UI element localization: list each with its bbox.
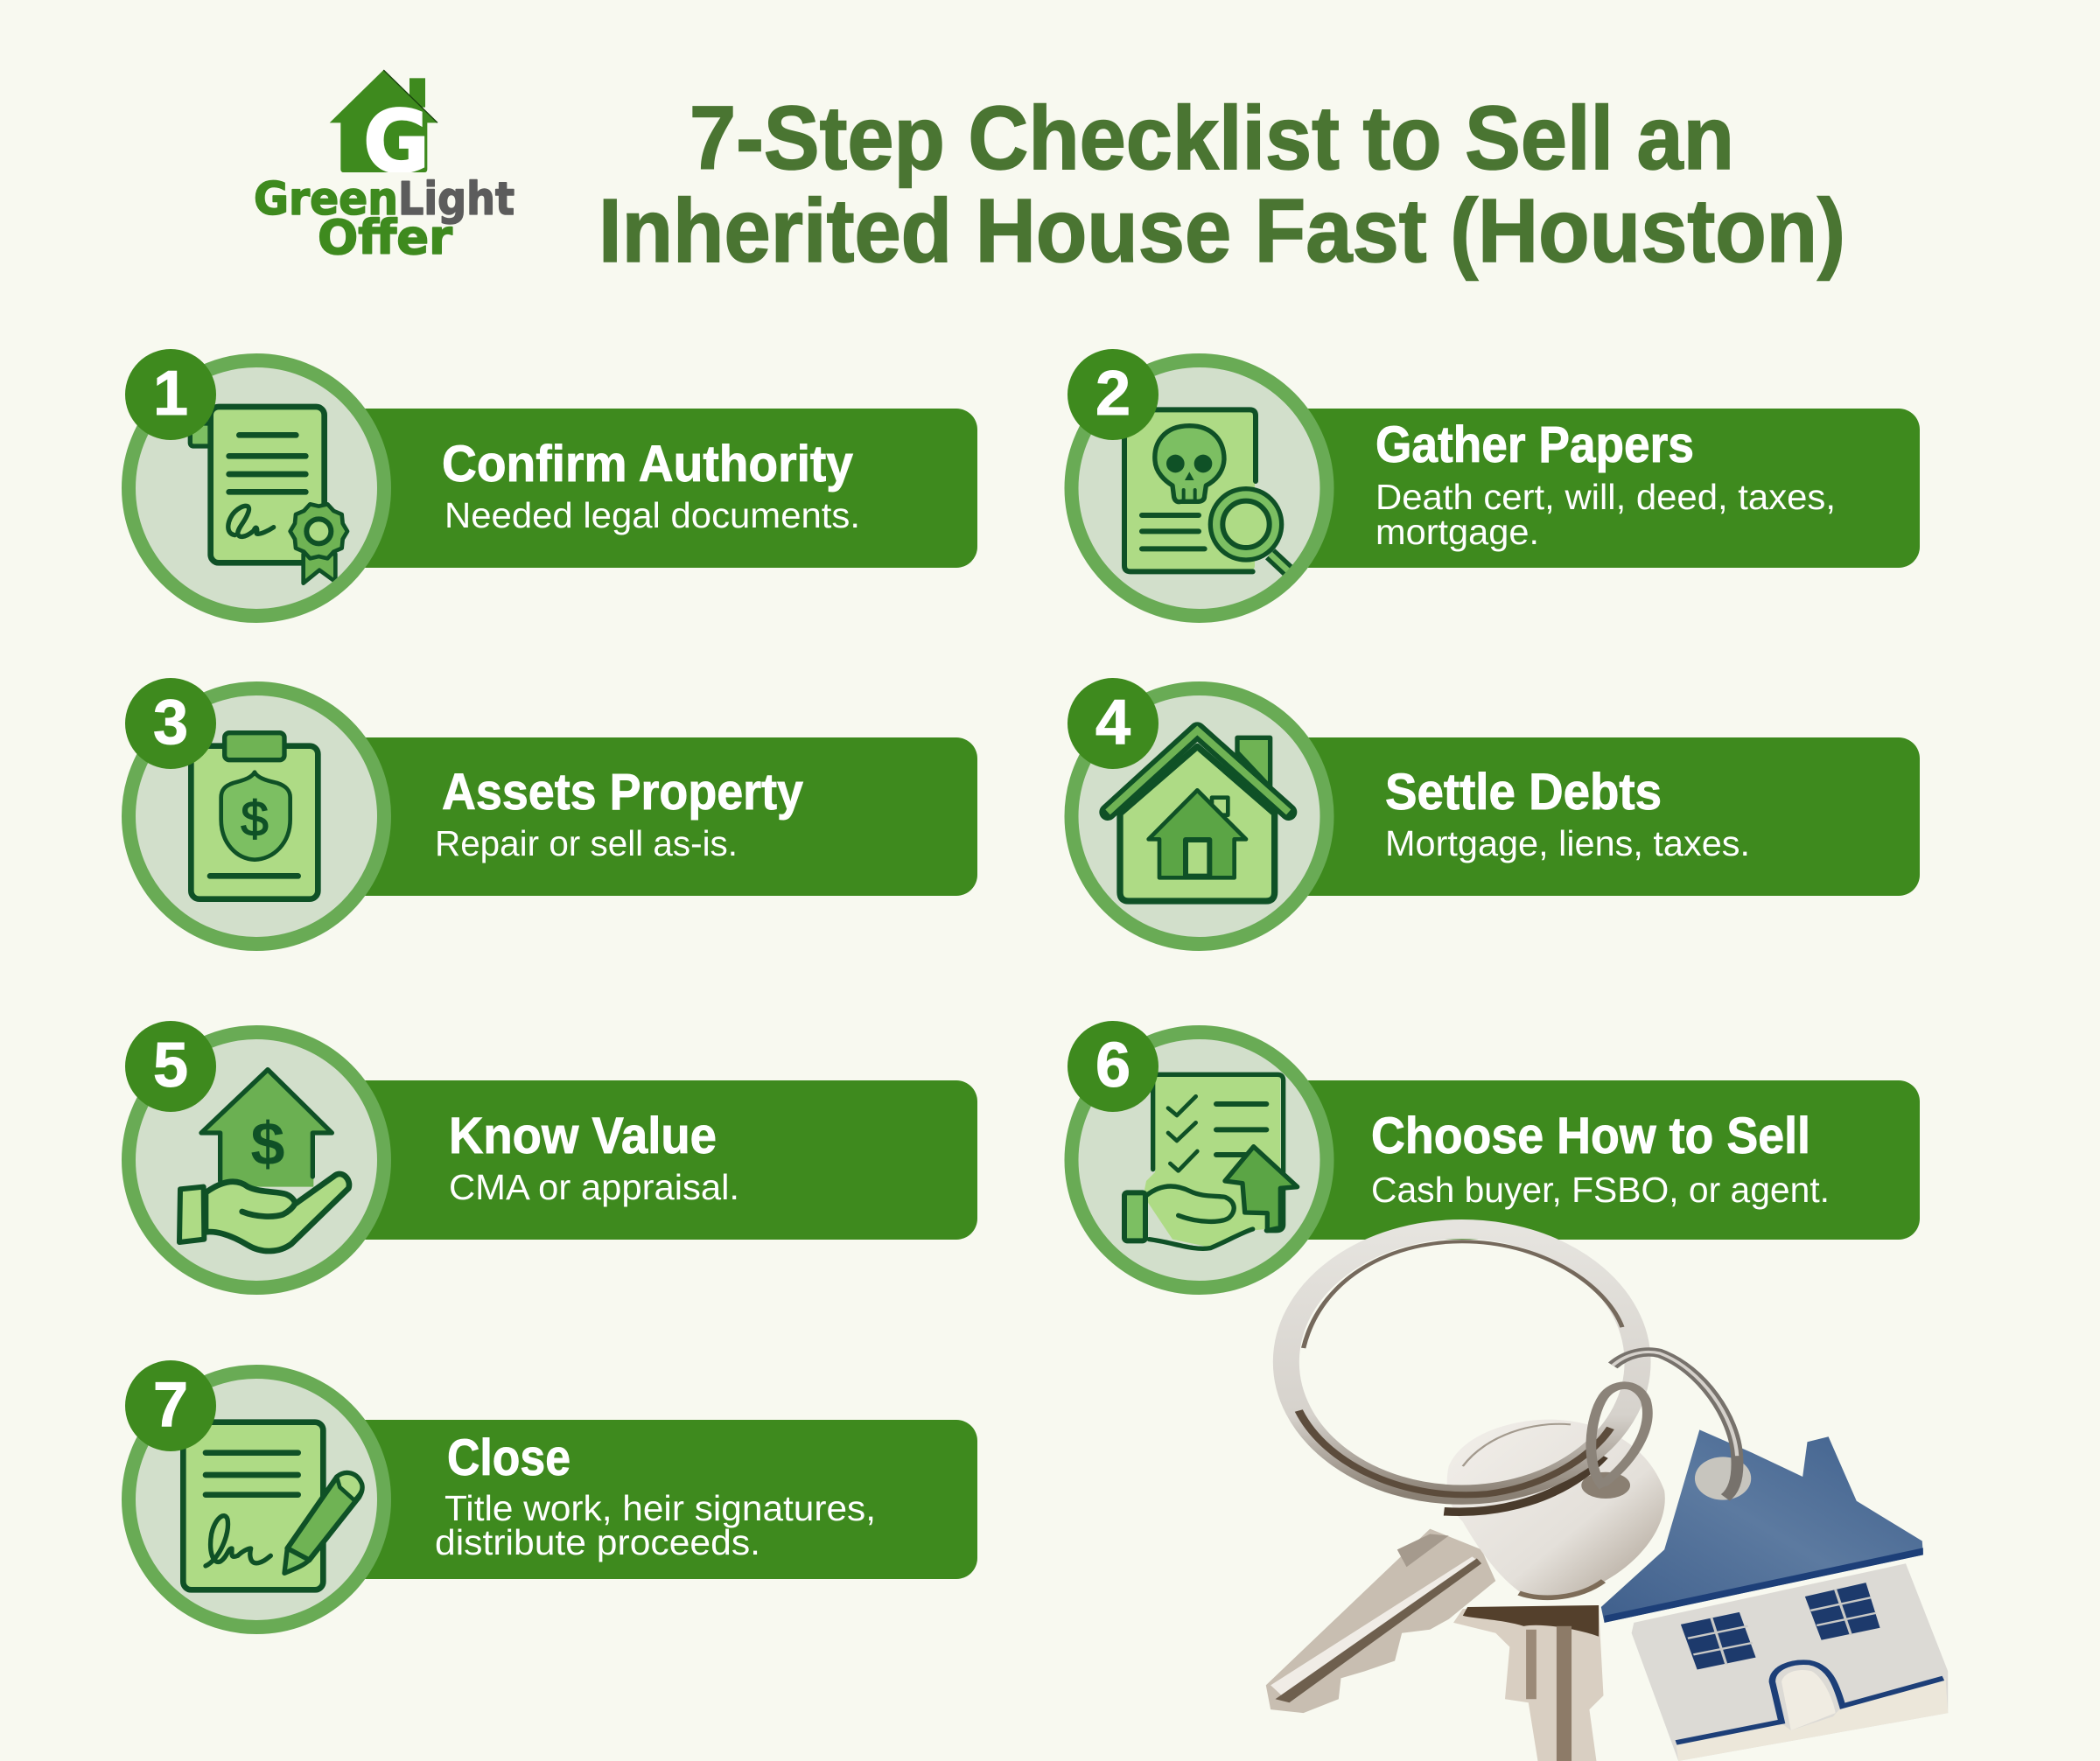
logo G letter: G [363,93,430,192]
logo wordmark Green: Green [254,173,398,226]
small link ring around keys [1591,1386,1648,1487]
house charm windows [1681,1612,1756,1669]
step 6 number badge [1068,1021,1158,1112]
step 4 number badge [1068,678,1158,769]
step 7 description: Title work, heir signatures, [444,1488,876,1528]
panel: step 4 settle debts [1068,678,1920,944]
icon: signed document and pen [183,1422,362,1590]
icon: hand holding house with dollar: $ [251,1110,284,1178]
house charm roof [1601,1429,1923,1623]
title: 7-Step Checklist to Sell an [690,87,1734,188]
first key blade [1266,1529,1495,1713]
step 3 number badge [125,678,216,769]
step 1 bar [280,409,977,568]
logo wordmark Light: Light [398,173,514,226]
step 6 description: Cash buyer, FSBO, or agent. [1371,1170,1830,1210]
second key hanging down [1453,1609,1603,1761]
charm ring through hole [1613,1352,1737,1498]
shadow under big ring [1444,1456,1603,1512]
step 3 description: Repair or sell as-is. [435,823,738,863]
logo: GreenLight Offer [254,70,514,265]
step 4 description: Mortgage, liens, taxes. [1385,823,1750,863]
step 5 bar [280,1080,977,1240]
step 1 description: Needed legal documents. [444,495,860,535]
title: Inherited House Fast (Houston) [598,180,1845,281]
step 7 heading: Close [447,1429,570,1486]
step 1 number badge: 1 [153,359,188,429]
icon: document with skull and magnifier [1124,409,1293,576]
step 2 bar [1222,409,1920,568]
step 1 heading: Confirm Authority [442,436,853,493]
icon: clipboard with dollar shield [191,733,318,899]
first key head [1447,1420,1665,1597]
icon: house within house [1108,730,1289,901]
step 7 description [435,1488,876,1562]
illustration: house keychain with keys [1266,1229,1948,1761]
step 2 description: mortgage. [1376,512,1539,552]
step 4 bar [1222,737,1920,896]
icon: signed certificate [190,407,347,584]
step 5 description: CMA or appraisal. [449,1167,739,1207]
house charm body [1632,1563,1948,1761]
step 2 number badge: 2 [1096,359,1130,429]
step 7 number badge [125,1360,216,1451]
panel: step 3 assets property [125,678,977,944]
step 5 number badge: 5 [153,1031,188,1101]
step 3 number badge: 3 [153,688,188,758]
step 7 description: distribute proceeds. [435,1522,760,1562]
title [598,87,1845,281]
panel: step 6 choose how to sell [1068,1021,1920,1288]
big key ring [1286,1229,1638,1495]
step 7 bar [280,1420,977,1579]
step 2 heading: Gather Papers [1376,416,1694,473]
step 5 heading: Know Value [449,1108,717,1164]
step 7 number badge: 7 [153,1370,188,1440]
panel: step 5 know value [125,1021,977,1288]
step 5 number badge [125,1021,216,1112]
step 3 bar [280,737,977,896]
step 1 number badge [125,349,216,440]
logo house mark [330,70,438,172]
step 3 heading: Assets Property [442,764,803,821]
step 2 number badge [1068,349,1158,440]
step 6 bar [1222,1080,1920,1240]
logo wordmark Offer: Offer [318,210,452,265]
step 6 heading: Choose How to Sell [1371,1108,1810,1164]
step 6 number badge: 6 [1096,1031,1130,1101]
panel: step 7 close [125,1360,977,1627]
step 2 description: Death cert, will, deed, taxes, [1376,477,1836,517]
step 2 description [1376,477,1836,552]
panel: step 1 confirm authority [125,349,977,616]
icon: hand holding house with dollar [179,1070,349,1251]
icon: clipboard with dollar shield: $ [241,793,269,848]
step 4 number badge: 4 [1096,688,1130,758]
step 4 heading: Settle Debts [1385,764,1662,821]
panel: step 2 gather papers [1068,349,1920,616]
icon: checklist, hand and house arrow [1124,1074,1298,1248]
